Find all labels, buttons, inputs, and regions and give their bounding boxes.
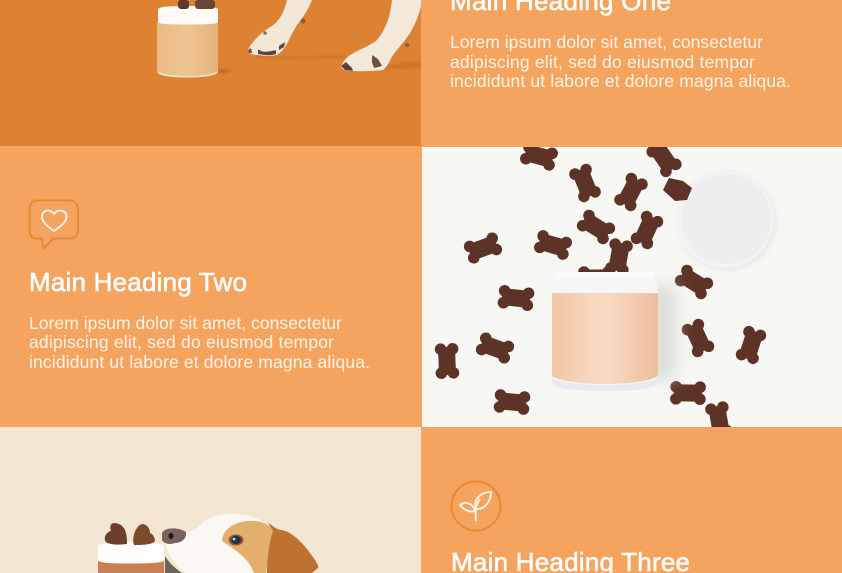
icon: leaf sprout in circle: [452, 482, 500, 530]
panel: photo of spilled bone treats: [421, 137, 842, 440]
panel: photo of dog paws and jar: [0, 0, 421, 146]
body text: adipiscing elit, sed do eiusmod tempor: [450, 52, 755, 72]
jar: [552, 272, 676, 391]
body text: [29, 313, 370, 372]
heart treat left: [105, 523, 127, 545]
panel: heading three: [451, 482, 690, 573]
jar lid: [676, 170, 776, 270]
jar with treats: [157, 0, 231, 78]
body text: adipiscing elit, sed do eiusmod tempor: [29, 332, 334, 352]
jar with heart treats: [98, 523, 164, 573]
heading: Main Heading Two: [29, 267, 247, 297]
heart treat right: [133, 524, 155, 545]
icon: speech bubble with heart: [30, 200, 78, 249]
panel: heading one: [450, 0, 791, 91]
panel: photo of dog sniffing jar: [0, 427, 421, 573]
body text: Lorem ipsum dolor sit amet, consectetur: [450, 32, 763, 52]
dog head: [162, 514, 318, 573]
panel: heading two: [29, 200, 370, 372]
dog rear leg: [341, 0, 421, 71]
bone treats: [435, 137, 768, 440]
body text: Lorem ipsum dolor sit amet, consectetur: [29, 313, 342, 333]
dog front leg: [248, 0, 345, 59]
body text: incididunt ut labore et dolore magna aliqua.: [450, 71, 791, 91]
body text: [450, 32, 791, 91]
body text: incididunt ut labore et dolore magna aliqua.: [29, 352, 370, 372]
